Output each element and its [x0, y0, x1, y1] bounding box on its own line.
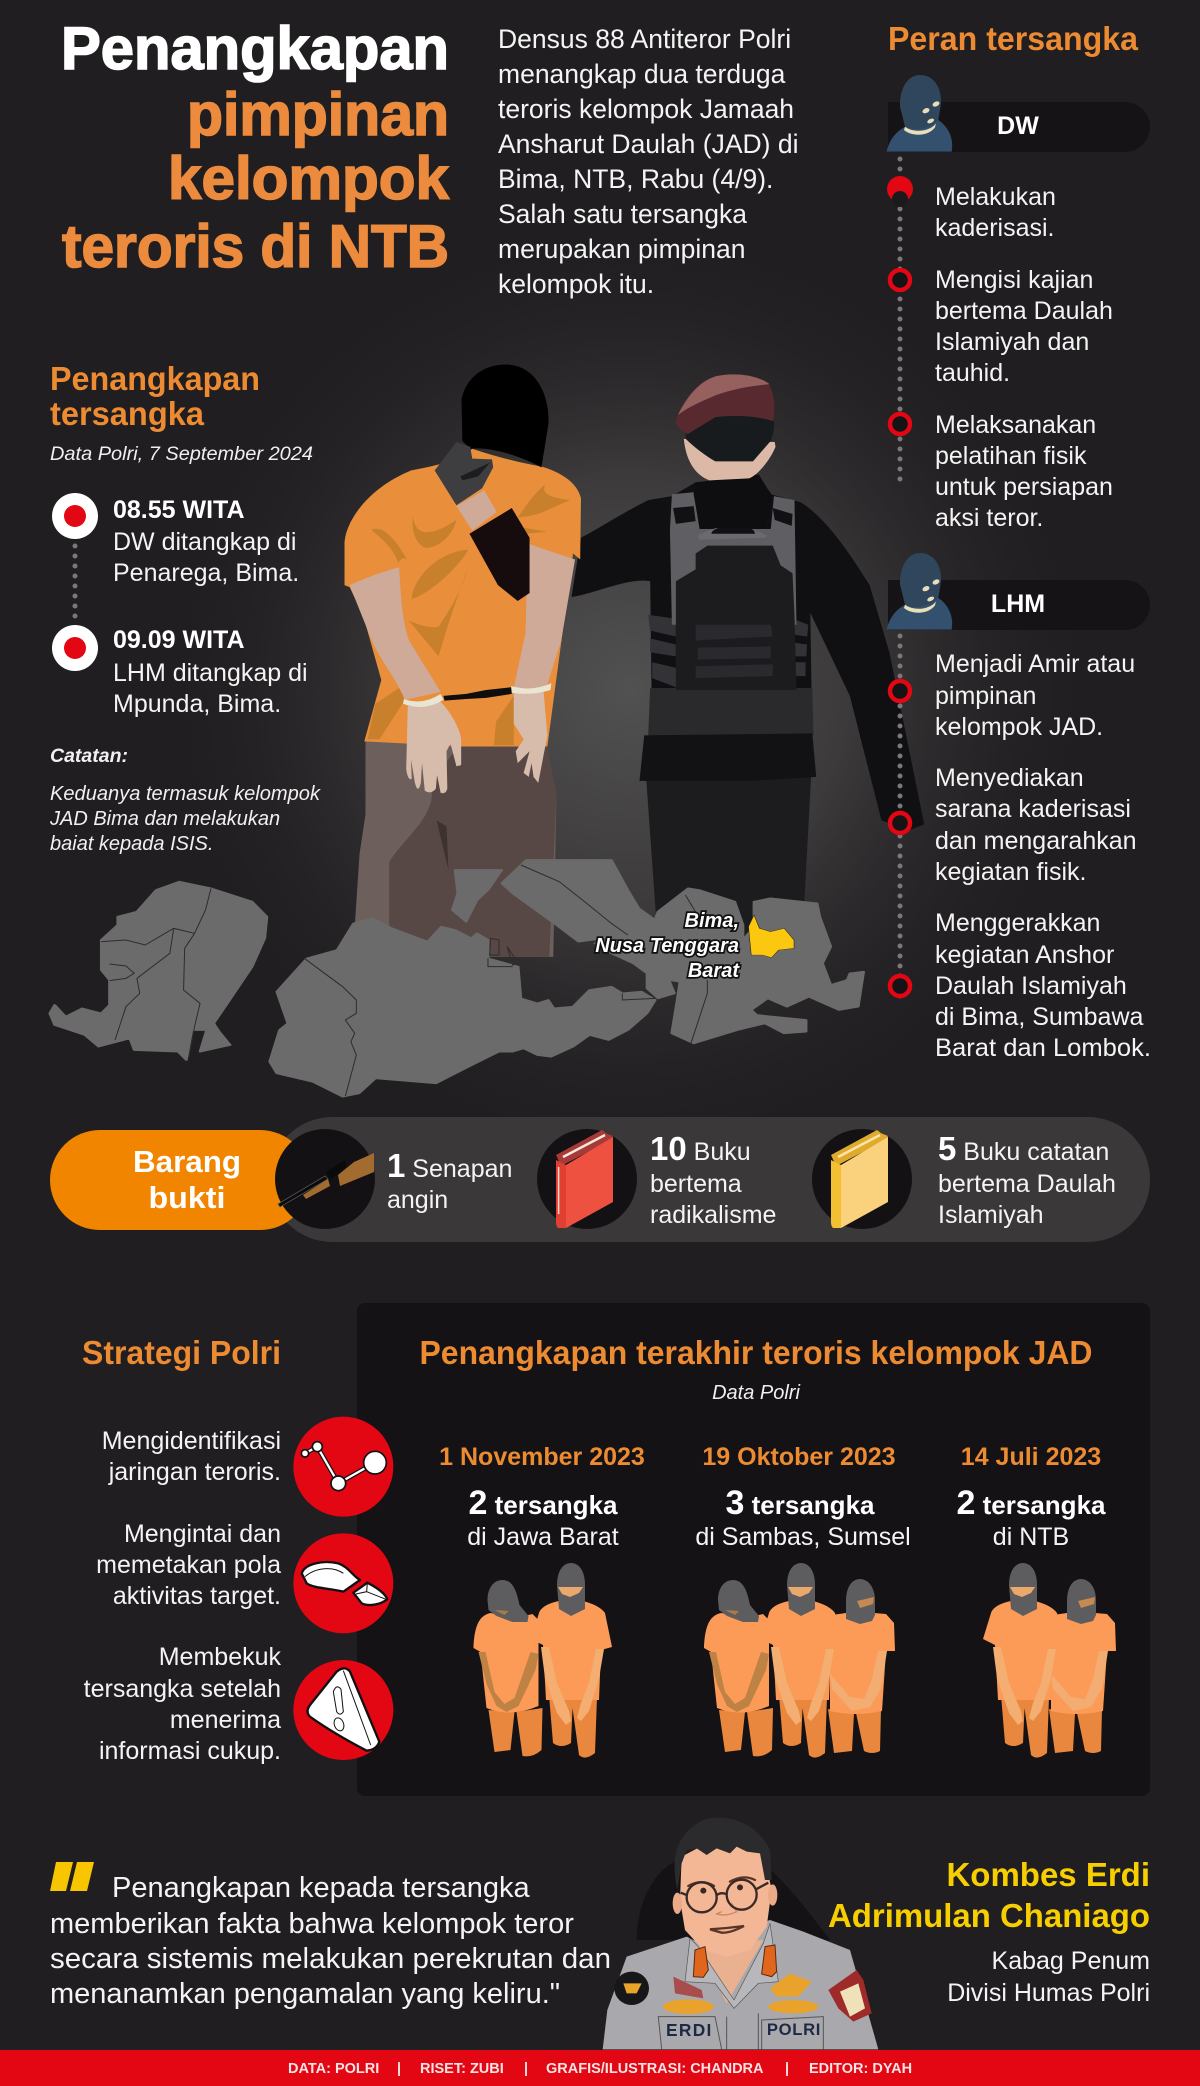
strategy text: menerima [170, 1706, 281, 1734]
icon: red book [537, 1129, 637, 1229]
map label: Bima: Barat [688, 960, 740, 982]
role list DW: kaderisasi. [935, 214, 1054, 242]
column: 14 Juli 2023: 14 Juli 2023 [961, 1443, 1101, 1471]
portrait: Kombes Erdi: POLRI [767, 2020, 821, 2039]
evidence label: bukti [148, 1180, 226, 1215]
item: books text: bertema [650, 1170, 742, 1198]
footer credits: | [397, 2061, 401, 2077]
heading: Penangkapan [50, 360, 260, 397]
intro paragraph: kelompok itu. [498, 269, 654, 299]
role list LHM: kelompok JAD. [935, 713, 1103, 741]
column: 1 November 2023: 2 tersangka [468, 1484, 618, 1522]
item: rifle text [387, 1147, 512, 1214]
wings and medals [673, 1977, 703, 1998]
timeline DW dots [898, 159, 902, 484]
main illustration: suspect and police officer [344, 365, 924, 957]
evidence bar [270, 1117, 1150, 1242]
role list LHM: sarana kaderisasi [935, 795, 1131, 823]
strategy text [84, 1427, 282, 1765]
role list DW: Melaksanakan [935, 411, 1096, 439]
role list LHM: pimpinan [935, 682, 1036, 710]
role list LHM: dan mengarahkan [935, 827, 1137, 855]
note: Keduanya termasuk kelompok [50, 783, 321, 805]
portrait: Kombes Erdi [603, 1818, 878, 2049]
strategy text: informasi cukup. [99, 1737, 281, 1765]
column: 19 Oktober 2023: 3 tersangka [726, 1484, 875, 1522]
icon: warning triangle [293, 1660, 393, 1760]
footer credits: EDITOR: DYAH [809, 2061, 912, 2077]
note [49, 745, 321, 855]
column: 1 November 2023: di Jawa Barat [467, 1523, 619, 1551]
role list LHM: kegiatan fisik. [935, 858, 1086, 886]
column: 14 Juli 2023: 2 tersangka [956, 1484, 1106, 1522]
hair [675, 1818, 772, 1890]
suspect [344, 365, 581, 957]
intro paragraph: merupakan pimpinan [498, 234, 745, 264]
collar [685, 1923, 778, 2008]
pill DW [887, 75, 1150, 152]
timeline: 09.09 WITA [113, 626, 245, 654]
footer credits: GRAFIS/ILUSTRASI: CHANDRA [546, 2061, 764, 2077]
intro paragraph: Salah satu tersangka [498, 199, 747, 229]
role list DW: Mengisi kajian [935, 266, 1093, 294]
icon: yellow book [812, 1129, 912, 1229]
intro paragraph: Densus 88 Antiteror Polri [498, 24, 791, 54]
role list DW: tauhid. [935, 359, 1010, 387]
footer credits: RISET: ZUBI [420, 2061, 504, 2077]
timeline: LHM ditangkap di [113, 659, 308, 687]
map label: Bima: Nusa Tenggara [595, 935, 739, 957]
intro paragraph: Bima, NTB, Rabu (4/9). [498, 164, 773, 194]
column: 19 Oktober 2023 [695, 1443, 911, 1758]
role list DW: Melakukan [935, 183, 1056, 211]
icon: surveillance cap [293, 1533, 393, 1633]
title: Penangkapan [61, 15, 449, 82]
speaker name: Kabag Penum [992, 1947, 1150, 1975]
role list LHM: Daulah Islamiyah [935, 972, 1127, 1000]
map label: Bima [595, 910, 740, 982]
role list DW: untuk persiapan [935, 473, 1113, 501]
icon: two suspects [983, 1563, 1116, 1758]
shirt placket [658, 2013, 823, 2049]
item: books text: 10 Buku [650, 1130, 751, 1167]
item: notebooks text [938, 1130, 1116, 1229]
source: Data Polri [712, 1382, 800, 1404]
badges [614, 1972, 649, 2005]
panel: police strategy [82, 1334, 393, 1765]
quote text [50, 1872, 611, 2010]
speaker name: Adrimulan Chaniago [828, 1897, 1150, 1934]
icon: quote mark [50, 1862, 94, 1891]
heading: Strategi Polri [82, 1334, 281, 1371]
heading: Peran tersangka [888, 20, 1139, 57]
footer credits: | [785, 2061, 789, 2077]
icon: network [293, 1417, 393, 1517]
glasses [681, 1880, 768, 1912]
icon: air rifle [275, 1129, 375, 1229]
evidence label: Barang [133, 1144, 241, 1179]
uniform [603, 1920, 878, 2049]
map of Nusa Tenggara Barat [50, 860, 864, 1097]
role list LHM: Menjadi Amir atau [935, 650, 1135, 678]
item: notebooks text: bertema Daulah [938, 1170, 1116, 1198]
strategy text: Mengintai dan [124, 1520, 281, 1548]
panel: evidence [50, 1117, 1150, 1242]
title [61, 15, 450, 280]
item: rifle text: angin [387, 1186, 448, 1214]
role list DW: aksi teror. [935, 504, 1043, 532]
item: notebooks text: 5 Buku catatan [938, 1130, 1109, 1167]
timeline: Mpunda, Bima. [113, 690, 281, 718]
timeline: DW ditangkap di [113, 528, 296, 556]
item: books text [650, 1130, 776, 1229]
strategy text: memetakan pola [96, 1551, 281, 1579]
role list LHM: Barat dan Lombok. [935, 1034, 1151, 1062]
speaker name: Divisi Humas Polri [947, 1979, 1150, 2007]
Bima highlighted region [748, 915, 794, 958]
role list DW [935, 183, 1113, 532]
footer credits: | [524, 2061, 528, 2077]
epaulettes [693, 1947, 708, 1977]
strategy text: Membekuk [159, 1643, 282, 1671]
note: Catatan: [50, 745, 128, 767]
pill LHM: LHM [991, 590, 1045, 618]
role list LHM [935, 650, 1151, 1062]
title: kelompok [168, 145, 450, 212]
note: baiat kepada ISIS. [50, 833, 213, 855]
item: rifle text: 1 Senapan [387, 1147, 512, 1184]
source: Data Polri, 7 September 2024 [50, 443, 313, 465]
pill DW: DW [997, 112, 1039, 140]
heading: tersangka [50, 395, 205, 432]
footer credits [0, 2050, 1200, 2086]
strategy text: Mengidentifikasi [102, 1427, 281, 1455]
map label: Bima: Bima, [685, 910, 739, 932]
intro paragraph: menangkap dua terduga [498, 59, 786, 89]
icon: two suspects [474, 1563, 612, 1758]
role list LHM: Menyediakan [935, 764, 1084, 792]
role list DW: Islamiyah dan [935, 328, 1089, 356]
timeline: Penarega, Bima. [113, 559, 299, 587]
speaker name: Kombes Erdi [946, 1856, 1150, 1893]
quote [50, 1862, 611, 2010]
pill LHM [887, 553, 1150, 630]
role list LHM: kegiatan Anshor [935, 941, 1114, 969]
quote text: menanamkan pengamalan yang keliru." [50, 1978, 560, 2010]
column: 14 Juli 2023 [956, 1443, 1116, 1758]
strategy text: jaringan teroris. [108, 1458, 281, 1486]
strategy text: tersangka setelah [84, 1675, 281, 1703]
markers [887, 176, 913, 996]
column: 1 November 2023: 1 November 2023 [439, 1443, 645, 1471]
column: 1 November 2023 [439, 1443, 645, 1758]
heading [50, 360, 260, 432]
name tags: ERDI [666, 2020, 713, 2040]
icon: three suspects [704, 1563, 895, 1758]
neck [698, 1940, 763, 2003]
quote text: memberikan fakta bahwa kelompok teror [50, 1908, 574, 1940]
face [680, 1843, 772, 1957]
heading: Penangkapan terakhir teroris kelompok JAD [420, 1334, 1092, 1371]
column: 19 Oktober 2023: 19 Oktober 2023 [702, 1443, 896, 1471]
title: teroris di NTB [62, 213, 449, 280]
strategy text: aktivitas target. [113, 1582, 281, 1610]
intro paragraph: Ansharut Daulah (JAD) di [498, 129, 798, 159]
column: 19 Oktober 2023: di Sambas, Sumsel [695, 1523, 911, 1551]
footer credits: DATA: POLRI [288, 2061, 379, 2077]
quote text: secara sistemis melakukan perekrutan dan [50, 1943, 611, 1975]
intro paragraph: teroris kelompok Jamaah [498, 94, 794, 124]
role list DW: pelatihan fisik [935, 442, 1087, 470]
speaker name [828, 1856, 1150, 2007]
timeline [52, 493, 308, 718]
note: JAD Bima dan melakukan [49, 808, 280, 830]
evidence label [50, 1130, 310, 1230]
panel: latest JAD arrests [357, 1303, 1150, 1796]
role list DW: bertema Daulah [935, 297, 1113, 325]
column: 14 Juli 2023: di NTB [993, 1523, 1069, 1551]
item: books text: radikalisme [650, 1201, 776, 1229]
timeline LHM dots [898, 636, 902, 1000]
backdrop [637, 1857, 830, 1940]
quote text: Penangkapan kepada tersangka [112, 1872, 530, 1904]
role list LHM: di Bima, Sumbawa [935, 1003, 1144, 1031]
item: notebooks text: Islamiyah [938, 1201, 1044, 1229]
title: pimpinan [187, 81, 449, 148]
panel: arrest of suspects [49, 360, 321, 855]
brows and mouth [688, 1877, 755, 1933]
panel: suspect roles [887, 20, 1151, 1062]
intro paragraph [498, 24, 798, 299]
role list LHM: Menggerakkan [935, 909, 1100, 937]
police officer [571, 374, 924, 957]
timeline: 08.55 WITA [113, 496, 245, 524]
